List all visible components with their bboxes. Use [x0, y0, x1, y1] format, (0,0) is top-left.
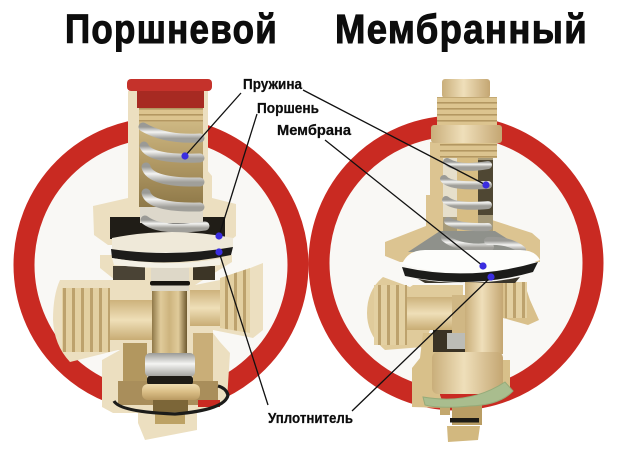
- upper cavities: [113, 266, 145, 280]
- spring coils: [143, 127, 205, 228]
- post: [465, 282, 503, 354]
- upper body: [385, 142, 540, 262]
- left pipe: [367, 277, 463, 350]
- left pipe thread: [62, 288, 110, 352]
- right pipe thread: [220, 268, 250, 333]
- bottom stub: [440, 405, 450, 415]
- top stub: [442, 79, 490, 98]
- right pipe: [500, 282, 539, 325]
- leader lines: [185, 90, 491, 411]
- left pipe bore: [110, 300, 153, 340]
- nut: [432, 352, 503, 394]
- stem head and o-ring: [151, 268, 189, 291]
- red ring: right: [319, 126, 593, 400]
- piston: [112, 232, 233, 253]
- right pipe bore: [190, 290, 220, 326]
- piston valve: [53, 79, 263, 440]
- lower thread: [440, 143, 497, 158]
- body backdrop: [53, 255, 263, 440]
- title: piston: Поршневой: [65, 6, 278, 52]
- red cap: [127, 79, 212, 91]
- title: membrane: Мембранный: [335, 6, 588, 52]
- lower steel ring: [145, 353, 195, 377]
- upper thread: [437, 97, 497, 125]
- spring chamber wall: [128, 91, 208, 206]
- black sealing ring: [114, 386, 228, 414]
- red behind seal: [198, 400, 220, 407]
- lower body: [412, 333, 445, 408]
- marker dots: [181, 152, 495, 281]
- label: piston: Поршень: [257, 101, 319, 117]
- label: spring: Пружина: [243, 77, 303, 93]
- lower chamber: [123, 343, 147, 381]
- piston housing: [93, 170, 236, 245]
- stem: [152, 290, 187, 358]
- label: membrane: Мембрана: [277, 123, 352, 139]
- red ring: left: [24, 128, 298, 402]
- membrane: [402, 250, 540, 274]
- green gasket: [423, 382, 513, 407]
- membrane valve: [367, 79, 540, 442]
- label: seal: Уплотнитель: [268, 411, 353, 427]
- collar: [431, 125, 502, 143]
- spring coils: [444, 162, 522, 250]
